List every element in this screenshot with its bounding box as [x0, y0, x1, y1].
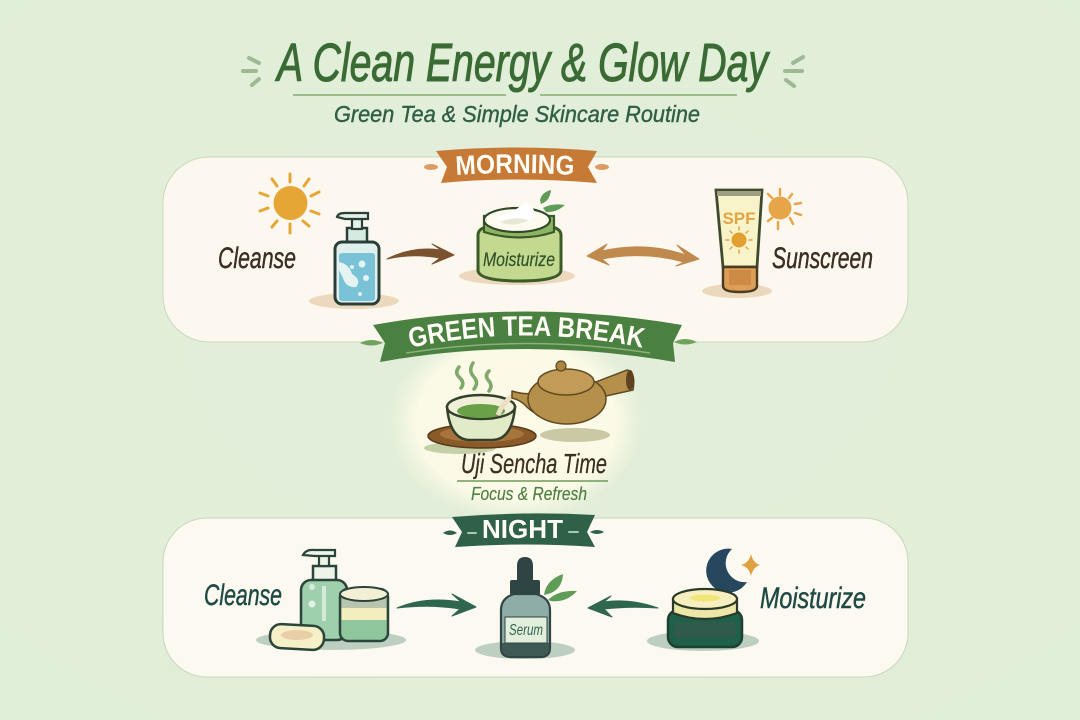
icon: small sun — [768, 189, 801, 229]
night banner — [443, 513, 604, 547]
label: cleanse night: Cleanse — [204, 579, 282, 612]
tea label — [457, 448, 608, 504]
label: sunscreen: Sunscreen — [772, 242, 873, 275]
morning banner — [424, 148, 609, 183]
tea label: Focus & Refresh — [471, 484, 587, 504]
icon: steam — [457, 363, 491, 391]
morning banner: MORNING — [456, 154, 573, 175]
arrow: moisturize to serum — [588, 596, 658, 617]
tea label: Uji Sencha Time — [461, 448, 607, 479]
panel: morning — [162, 148, 908, 342]
icon: saucer and cup — [424, 395, 536, 454]
icon: moon — [706, 549, 747, 593]
night banner: NIGHT — [482, 514, 563, 544]
icon: serum bottle — [475, 557, 577, 659]
icon: sunscreen tube — [702, 190, 772, 298]
arrow: cleanse to moisturize — [387, 244, 454, 264]
green tea banner — [360, 312, 697, 362]
panel: night — [163, 513, 908, 677]
green tea banner: GREEN TEA BREAK — [409, 316, 646, 348]
icon: cleansing set — [256, 550, 406, 650]
icon: night cream jar — [647, 589, 759, 651]
icon: moisturizer jar: Moisturize — [483, 250, 555, 271]
icon: star — [741, 554, 760, 576]
title sparks right — [785, 57, 803, 86]
subtitle: Green Tea & Simple Skincare Routine — [334, 101, 700, 127]
icon: serum bottle: Serum — [509, 622, 543, 639]
icon: sunscreen tube: SPF — [722, 209, 756, 228]
glow behind tea — [388, 322, 644, 522]
icon: pump bottle — [309, 213, 399, 309]
title sparks left — [243, 58, 259, 85]
label: moisturize night: Moisturize — [760, 582, 866, 615]
icon: moisturizer jar — [459, 190, 575, 285]
icon: sun — [260, 174, 319, 233]
arrow: cleanse to serum — [397, 594, 476, 616]
title: A Clean Energy & Glow Day — [275, 33, 770, 93]
arrow: moisturize to sunscreen — [587, 244, 699, 266]
label: cleanse: Cleanse — [218, 242, 296, 275]
icon: teapot — [498, 361, 634, 442]
